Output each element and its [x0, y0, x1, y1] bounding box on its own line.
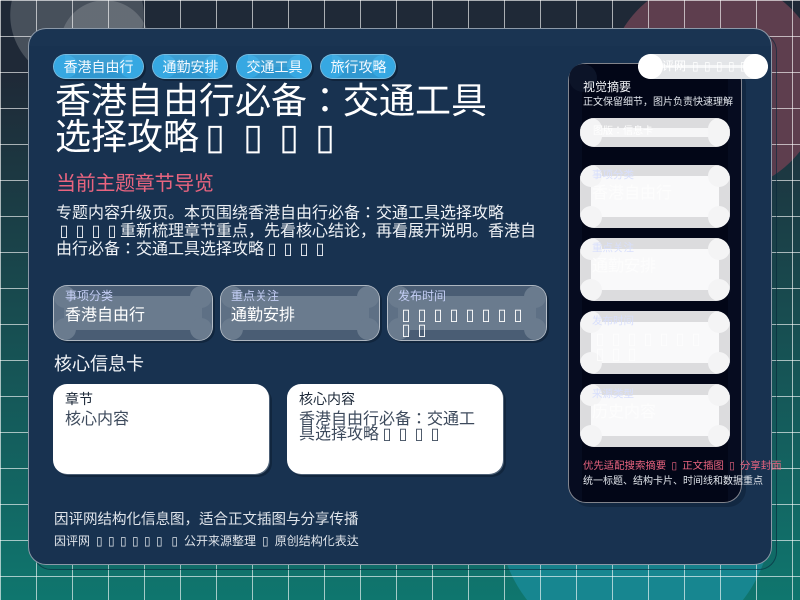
intro paragraph: ▯: [108, 223, 116, 240]
side card: publish time: [580, 311, 730, 374]
side footnote: ▯: [729, 461, 735, 472]
intro paragraph: ▯: [300, 241, 308, 258]
intro paragraph: ▯: [76, 223, 84, 240]
intro paragraph: ▯: [268, 241, 276, 258]
top brand pill: ▯: [716, 59, 723, 73]
top brand pill: 因评网: [650, 59, 686, 73]
info card: core content: [287, 384, 503, 474]
info card: core content: ▯: [431, 426, 439, 443]
title: ▯: [243, 116, 263, 157]
side card: category: 事项分类: [592, 169, 634, 181]
side footnote: ▯: [671, 461, 677, 472]
side card: source type: [580, 384, 730, 447]
stat card: publish time: ▯: [498, 307, 506, 324]
side footnote: 优先适配搜索摘要 正文插图 分享封面: [583, 461, 782, 472]
intro paragraph: ▯: [316, 241, 324, 258]
stat card: category: 香港自由行: [65, 307, 145, 324]
side card: publish time: ▯: [644, 331, 652, 348]
side card: publish time: ▯: [612, 346, 620, 363]
stat card: publish time: ▯: [402, 307, 410, 324]
intro paragraph: 专题内容升级页。本页围绕香港自由行必备：交通工具选择攻略: [56, 205, 504, 222]
intro paragraph: [56, 204, 536, 258]
side card: focus: 通勤安排: [592, 258, 656, 275]
info card: core content: 香港自由行必备：交通工: [299, 411, 475, 428]
footer text: ▯: [262, 534, 269, 548]
title: ▯: [315, 116, 335, 157]
side heading: 视觉摘要: [583, 80, 631, 94]
top brand pill: ▯: [740, 59, 747, 73]
stat card: publish time: ▯: [418, 322, 426, 339]
stat card: category: 事项分类: [65, 289, 113, 303]
intro paragraph: 重新梳理章节重点，先看核心结论，再看展开说明。香港自: [120, 223, 536, 240]
side card: focus: 重点关注: [592, 242, 634, 254]
footer text: 因评网结构化信息图，适合正文插图与分享传播: [54, 512, 358, 528]
top brand pill: ▯: [728, 59, 735, 73]
info card: chapter: [53, 384, 269, 474]
title: ▯: [205, 116, 225, 157]
side description: 正文保留细节，图片负责快速理解: [583, 97, 733, 108]
stat card: category: [53, 285, 213, 341]
stat card: focus: [220, 285, 380, 341]
top brand pill: ▯: [752, 59, 759, 73]
top brand pill: ▯: [704, 59, 711, 73]
side card: source type: 历史内容: [592, 404, 656, 421]
stat card: publish time: ▯: [482, 307, 490, 324]
footer text: ▯: [120, 534, 127, 548]
title: 香港自由行必备：交通工具: [55, 80, 487, 121]
side card: category: [580, 165, 730, 228]
stat card: publish time: 发布时间: [398, 289, 446, 303]
footer text: ▯: [108, 534, 115, 548]
info card: core content: 核心内容: [299, 391, 355, 407]
tag chips: [53, 54, 398, 81]
stat card: publish time: ▯: [466, 307, 474, 324]
side card: publish time: ▯: [596, 331, 604, 348]
intro paragraph: 由行必备：交通工具选择攻略: [56, 241, 264, 258]
info card: core content: ▯: [415, 426, 423, 443]
info card: chapter: 章节: [65, 391, 93, 407]
title: 选择攻略: [55, 116, 199, 157]
side card: publish time: ▯: [660, 331, 668, 348]
footer text: ▯: [144, 534, 151, 548]
tag chips: 旅行攻略: [330, 59, 386, 75]
info card: core content: 具选择攻略: [299, 426, 379, 443]
footer text: [54, 511, 359, 548]
title: [55, 80, 487, 157]
footer text: 因评网 公开来源整理 原创结构化表达: [54, 534, 359, 548]
stat card: publish time: ▯: [418, 307, 426, 324]
side card: publish time: 发布时间: [592, 315, 634, 327]
info card: chapter: 核心内容: [65, 411, 129, 428]
side card: source type: 来源类型: [592, 388, 634, 400]
title: ▯: [279, 116, 299, 157]
side card: publish time: ▯: [628, 331, 636, 348]
info card: core content: ▯: [399, 426, 407, 443]
footer text: ▯: [132, 534, 139, 548]
top brand pill: ▯: [692, 59, 699, 73]
stat card: publish time: ▯: [514, 307, 522, 324]
side card: publish time: ▯: [676, 331, 684, 348]
stat card: focus: 通勤安排: [231, 307, 295, 324]
footer text: ▯: [96, 534, 103, 548]
stat card: publish time: ▯: [450, 307, 458, 324]
footer text: ▯: [171, 534, 178, 548]
side card: publish time: ▯: [612, 331, 620, 348]
subtitle: 当前主题章节导览: [56, 173, 214, 195]
side card: layout: [580, 118, 730, 147]
side card: publish time: ▯: [692, 331, 700, 348]
side note: 统一标题、结构卡片、时间线和数据重点: [583, 476, 763, 487]
info card: core content: ▯: [383, 426, 391, 443]
side card: focus: [580, 238, 730, 301]
side card: layout: 图版：信息卡: [593, 126, 653, 137]
side card: publish time: ▯: [628, 346, 636, 363]
intro paragraph: ▯: [92, 223, 100, 240]
tag chips: 交通工具: [246, 59, 302, 75]
tag chips: 香港自由行: [64, 59, 134, 75]
side card: publish time: ▯: [596, 346, 604, 363]
side panel: [568, 63, 742, 503]
side card: category: 香港自由行: [592, 185, 672, 202]
intro paragraph: ▯: [60, 223, 68, 240]
stat card: publish time: [387, 285, 547, 341]
intro paragraph: ▯: [284, 241, 292, 258]
section heading: 核心信息卡: [54, 354, 144, 374]
stat card: publish time: ▯: [434, 307, 442, 324]
stat card: focus: 重点关注: [231, 289, 279, 303]
top brand pill: [638, 54, 768, 79]
stat card: publish time: ▯: [402, 322, 410, 339]
tag chips: 通勤安排: [162, 59, 218, 75]
footer text: ▯: [156, 534, 163, 548]
